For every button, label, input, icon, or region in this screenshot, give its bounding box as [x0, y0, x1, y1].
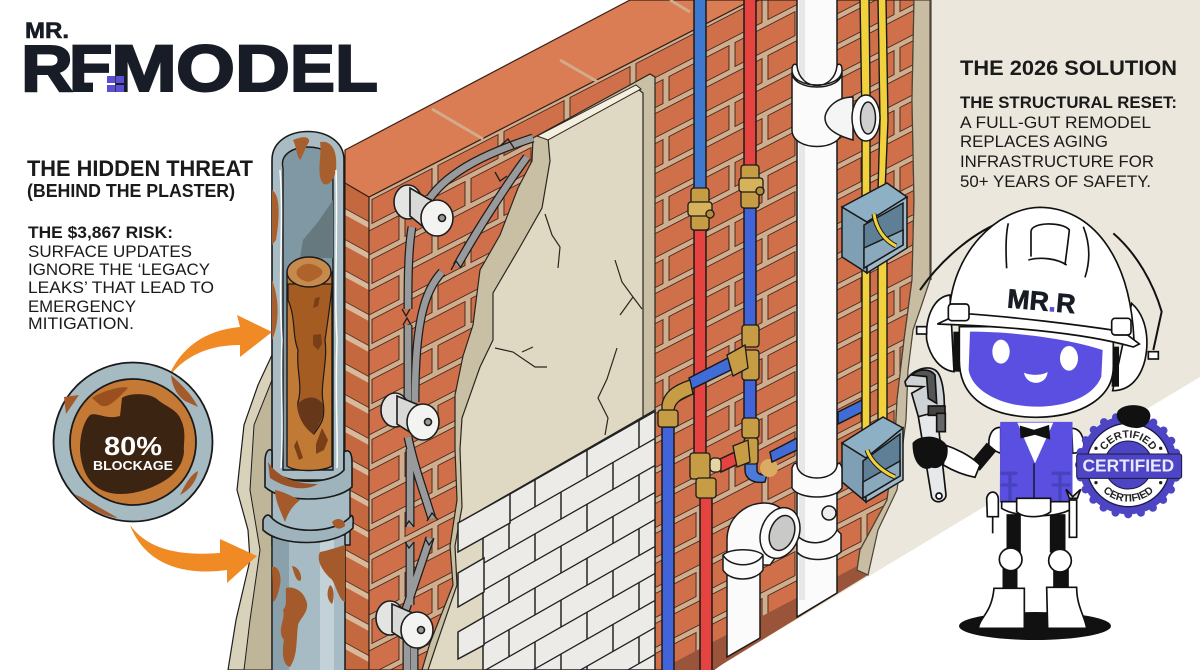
red pipe lower [700, 497, 712, 670]
T fitting upper [792, 72, 842, 146]
logo word: REMODEL: O [176, 31, 235, 105]
right ear muff [1112, 303, 1147, 391]
yellow cable lower left [862, 270, 870, 435]
panel: cracked plaster [422, 74, 655, 670]
badge bottom ring text: CERTIFIED [1104, 487, 1152, 502]
red short branch [718, 452, 738, 472]
robot hand [913, 437, 947, 468]
brass tee upper [727, 325, 759, 380]
main drain pipe [797, 0, 837, 617]
hand gripping badge [1118, 406, 1150, 427]
knees [999, 548, 1071, 572]
wrench [905, 368, 946, 502]
dark rust mottling [92, 387, 128, 406]
panel: plaster strip left of pipe [228, 355, 290, 670]
logo word: REMODEL: L [335, 31, 378, 105]
robot arm holding wrench [943, 445, 992, 477]
fray marks [402, 139, 514, 548]
logo word: REMODEL: M [111, 31, 177, 105]
lower pipe rust patches [272, 490, 345, 667]
blue pipe second line [744, 208, 756, 326]
badge centre [1104, 441, 1152, 489]
blue cross branch [689, 358, 731, 389]
arrow: top orange arrow [168, 315, 272, 378]
lower pipe body [272, 535, 345, 670]
legs [1003, 515, 1068, 590]
lower collar 2 [797, 530, 841, 560]
icon: ceramic insulator middle [381, 393, 439, 440]
blue broken pipe end [770, 438, 797, 462]
upper coupling ring [265, 450, 352, 499]
helmet label: MR.R [1006, 283, 1077, 319]
left ear muff [926, 295, 960, 372]
elbow outlet [753, 502, 807, 564]
vest [1001, 423, 1072, 502]
yellow cable upper left [860, 0, 870, 203]
brass tee centre [733, 418, 759, 467]
stat: 80%: 80% [104, 431, 162, 461]
headband straps [920, 220, 1162, 350]
tool belt [987, 489, 1081, 537]
robot face [969, 332, 1103, 407]
panel: mixed plumbing supply lines [662, 0, 862, 670]
brick wall side face [345, 183, 369, 670]
frayed wires grey core [405, 138, 533, 670]
elbow pipe lower [727, 570, 760, 657]
brass coupling elbow base [658, 410, 678, 427]
plaster backing and broken edge [422, 74, 655, 670]
plaster top lip [537, 85, 641, 140]
robot smile [1024, 372, 1048, 383]
risk body: LEAKS’ THAT LEAD TO [28, 279, 214, 297]
logo window icon [107, 76, 124, 92]
red pipe below valve [694, 230, 706, 455]
callout: 80% blockage pipe cross-section [54, 362, 212, 522]
zipper and pockets [1032, 463, 1036, 502]
pipe wall highlight line left [280, 170, 282, 468]
rust clog [297, 398, 323, 434]
T outlet [825, 95, 880, 141]
lower pipe highlight [320, 530, 334, 670]
solution lead: THE STRUCTURAL RESET: [960, 93, 1177, 112]
icon: junction box lower [842, 417, 903, 502]
plaster face [428, 89, 643, 670]
panel: white PVC drain stack [723, 0, 880, 657]
red pipe upper second line [744, 0, 756, 166]
rust column [287, 272, 332, 470]
logo word: REMODEL: E [290, 31, 335, 105]
blue supply pipe upper [694, 0, 706, 192]
yellow cable upper right [878, 0, 888, 192]
protruding tile 2 [458, 558, 484, 607]
brass valve 1 [688, 188, 714, 230]
brass tee lower [690, 453, 721, 498]
yellow cable lower right [878, 258, 887, 425]
cleanout plug [822, 506, 836, 520]
panel: yellow electrical cables [860, 0, 888, 435]
text block: the hidden threat [27, 156, 254, 333]
thin wall trim line [930, 0, 932, 280]
lower coupling ring [263, 515, 353, 543]
coupling rust [268, 462, 318, 488]
boots [978, 587, 1087, 628]
risk body [28, 243, 214, 333]
blockage core [80, 394, 184, 494]
heading: THE 2026 SOLUTION [960, 57, 1177, 80]
pipe wall highlight line right [336, 170, 337, 468]
rust flecks [294, 297, 328, 460]
illustration: Mr. R robot mascot [904, 206, 1182, 640]
robot eyes [992, 340, 1078, 371]
elbow collar [723, 550, 763, 579]
hard hat ridge [1006, 223, 1089, 277]
solution body: A FULL-GUT REMODEL [960, 113, 1151, 132]
subheading: (BEHIND THE PLASTER) [27, 181, 235, 201]
logo E cutout [93, 73, 113, 95]
elbow bend [727, 503, 795, 565]
arrow: bottom orange arrow [130, 525, 257, 583]
blue pipe between fittings [744, 380, 756, 420]
floor shadow [959, 612, 1111, 640]
bow tie [1021, 426, 1049, 438]
brass valve 2 [739, 165, 764, 208]
lower collar [792, 463, 842, 497]
brick wall top cap [345, 0, 752, 197]
logo: Mr. Remodel [21, 18, 378, 105]
elbow collar front line [723, 555, 763, 565]
tile field [483, 410, 655, 670]
rust plug mottling [297, 264, 323, 282]
icon: ceramic insulator bottom [376, 601, 433, 648]
panel: brass fittings [658, 165, 764, 498]
pipe interior [282, 147, 334, 470]
badge ring dots [1094, 447, 1162, 484]
outer pipe ring [54, 362, 212, 522]
solution body: REPLACES AGING [960, 132, 1108, 151]
icon: junction box upper [842, 183, 907, 273]
pipe shell cutaway [272, 132, 344, 490]
badge top ring text: CERTIFIED [1100, 430, 1156, 450]
protruding tile 1 [458, 494, 510, 552]
interior shadow [300, 200, 333, 258]
badge banner text: CERTIFIED [1082, 456, 1174, 476]
logo line: MR.: MR. [25, 18, 69, 43]
outer ring rust [64, 375, 198, 518]
lower coupling body [272, 480, 350, 545]
risk body: SURFACE UPDATES [28, 243, 192, 261]
heading: THE HIDDEN THREAT [27, 156, 254, 181]
badge ring [1087, 423, 1170, 507]
stat label: blockage: BLOCKAGE [93, 458, 173, 473]
shoulders [989, 427, 1084, 453]
certified badge [1075, 405, 1182, 518]
hat clips [917, 304, 1158, 359]
shirt V [1017, 423, 1053, 463]
frayed wires dark outline [405, 138, 533, 670]
risk body: IGNORE THE ‘LEGACY [28, 261, 210, 279]
background: beige room wall [713, 0, 1200, 670]
right plaster edge [857, 0, 930, 575]
logo word: REMODEL: D [235, 31, 290, 105]
interior top rust [272, 137, 336, 340]
inner rust ring [70, 379, 196, 505]
solution body: INFRASTRUCTURE FOR [960, 152, 1154, 171]
dark brick band at floor [673, 563, 868, 670]
brass elbow [662, 380, 693, 427]
blue pipe far left [662, 427, 674, 670]
panel: brick wall cross-section [345, 0, 930, 670]
T fitting collar [792, 64, 842, 86]
risk body: MITIGATION. [28, 315, 134, 333]
risk body: EMERGENCY [28, 298, 136, 316]
pipe shading [799, 0, 805, 600]
panel: frayed knob-and-tube wiring [402, 138, 533, 670]
hard hat brim [937, 313, 1139, 347]
solution body: 50+ YEARS OF SAFETY. [960, 172, 1151, 191]
brick wall front face [369, 0, 914, 670]
panel: white replacement tile [458, 410, 655, 670]
robot head [959, 327, 1113, 417]
text block: the 2026 solution [960, 57, 1177, 191]
lower pipe shadow [273, 530, 289, 670]
badge banner [1077, 454, 1182, 478]
badge scallop [1079, 416, 1178, 514]
leak spot [760, 459, 778, 477]
icon: ceramic insulator top [394, 185, 453, 236]
plaster cracks [495, 214, 642, 435]
risk lead: THE $3,867 RISK: [28, 224, 173, 242]
logo word: REMODEL: R [21, 31, 73, 105]
blue pipe behind drain [838, 400, 862, 424]
leaking blue elbow [745, 463, 767, 482]
logo word: REMODEL: E [69, 31, 114, 105]
protruding tile 3 [458, 617, 484, 659]
rust channel [288, 284, 332, 434]
elbow opening [765, 512, 799, 554]
solution body [960, 113, 1154, 191]
hard hat dome [949, 207, 1134, 340]
logo word: REMODEL [21, 31, 378, 105]
rust plug top [287, 257, 331, 287]
panel: rusted galvanized pipe [263, 132, 353, 670]
